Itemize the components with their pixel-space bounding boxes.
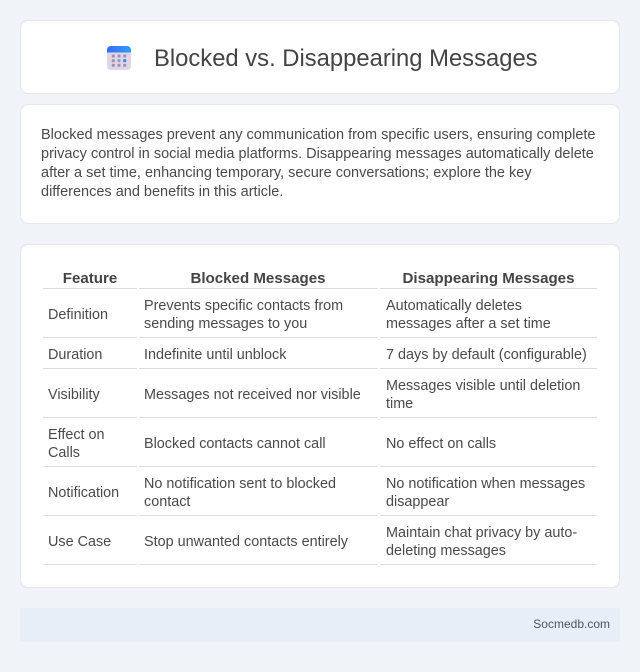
row: definition: sending messages to you xyxy=(144,316,307,332)
row: use case: Maintain chat privacy by auto- xyxy=(386,525,577,541)
row: visibility xyxy=(48,378,580,412)
row: use case: Stop unwanted contacts entirely xyxy=(144,534,348,550)
table header: Disappearing Messages xyxy=(402,270,574,287)
row: notification: No notification when messages xyxy=(386,476,585,492)
footer bar xyxy=(20,608,620,642)
row: notification: contact xyxy=(144,494,190,510)
row: visibility: time xyxy=(386,396,413,412)
row: duration: Duration xyxy=(48,347,102,363)
row: definition: Definition xyxy=(48,307,108,323)
row: effect on calls: Blocked contacts cannot call xyxy=(144,436,326,452)
row: effect on calls: No effect on calls xyxy=(386,436,496,452)
row: definition xyxy=(48,298,551,332)
row: duration xyxy=(48,347,587,363)
intro paragraph: privacy control in social media platforms. Disappearing messages automatically delete xyxy=(41,146,594,162)
row: visibility: Visibility xyxy=(48,387,100,403)
row: use case: deleting messages xyxy=(386,543,506,559)
row: notification: No notification sent to blocked xyxy=(144,476,336,492)
panel: intro text xyxy=(20,104,620,224)
panel: comparison table xyxy=(20,244,620,588)
row: visibility: Messages not received nor visible xyxy=(144,387,361,403)
icon: calendar xyxy=(107,46,131,70)
intro paragraph xyxy=(41,127,595,200)
panel: title card xyxy=(20,20,620,94)
row: definition: Automatically deletes xyxy=(386,298,522,314)
row: effect on calls xyxy=(48,427,496,461)
table header: Blocked Messages xyxy=(190,270,326,287)
row: duration: Indefinite until unblock xyxy=(144,347,286,363)
row: definition: Prevents specific contacts from xyxy=(144,298,343,314)
intro paragraph: differences and benefits in this article. xyxy=(41,184,283,200)
row: visibility: Messages visible until deletion xyxy=(386,378,580,394)
title: Blocked vs. Disappearing Messages xyxy=(154,45,538,72)
comparison table xyxy=(48,270,587,559)
row: effect on calls: Effect on xyxy=(48,427,105,443)
footer credit: Socmedb.com xyxy=(533,617,610,631)
intro paragraph: Blocked messages prevent any communication from specific users, ensuring complete xyxy=(41,127,595,143)
row: use case xyxy=(48,525,577,559)
row: duration: 7 days by default (configurable) xyxy=(386,347,587,363)
row: notification: disappear xyxy=(386,494,449,510)
row: effect on calls: Calls xyxy=(48,445,80,461)
row: notification: Notification xyxy=(48,485,119,501)
row: definition: messages after a set time xyxy=(386,316,551,332)
row: use case: Use Case xyxy=(48,534,111,550)
table header xyxy=(63,270,574,287)
row: notification xyxy=(48,476,585,510)
table header: Feature xyxy=(63,270,117,287)
intro paragraph: after a set time, enhancing temporary, secure conversations; explore the key xyxy=(41,165,532,181)
